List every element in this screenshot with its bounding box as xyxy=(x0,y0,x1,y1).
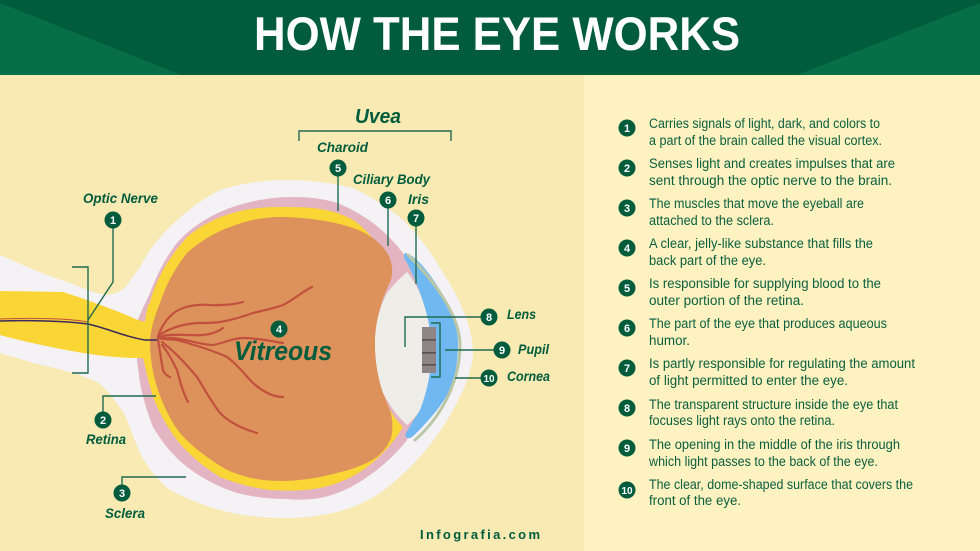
item 7: Is partly responsible for regulating the amount xyxy=(649,356,915,371)
item 1: a part of the brain called the visual cortex. xyxy=(649,133,882,148)
item 3 xyxy=(618,196,864,228)
item 10: The clear, dome-shaped surface that covers the xyxy=(649,477,913,492)
item 6: The part of the eye that produces aqueous xyxy=(649,316,887,331)
callout 1: optic nerve: Optic Nerve xyxy=(83,190,158,206)
item 3: attached to the sclera. xyxy=(649,213,774,228)
callout 3: sclera: Sclera xyxy=(105,505,145,521)
item 6: 6 xyxy=(624,323,630,335)
callout 6: ciliary body: 6 xyxy=(385,195,391,207)
callout 5: choroid: 5 xyxy=(335,163,341,175)
item 9: 9 xyxy=(624,443,630,455)
item 6: humor. xyxy=(649,333,690,348)
item 10: 10 xyxy=(621,486,633,497)
source credit: Infografia.com xyxy=(420,527,540,542)
item 1: Carries signals of light, dark, and colors to xyxy=(649,116,880,131)
callout 7: iris: 7 xyxy=(413,213,419,225)
item 4: A clear, jelly-like substance that fills the xyxy=(649,236,873,251)
callout 7: iris xyxy=(408,191,429,284)
callout 6: ciliary body: Ciliary Body xyxy=(353,171,431,187)
item 7 xyxy=(618,356,915,388)
item 3: The muscles that move the eyeball are xyxy=(649,196,864,211)
pupil xyxy=(422,327,436,373)
header banner xyxy=(0,0,980,75)
callout 7: iris: Iris xyxy=(408,191,429,207)
item 6 xyxy=(618,316,887,348)
item 9: The opening in the middle of the iris through xyxy=(649,437,900,452)
callout 2: retina: Retina xyxy=(86,431,126,447)
callout 4: vitreous: Vitreous xyxy=(234,336,332,366)
item 5 xyxy=(618,276,881,308)
callout 3: sclera: 3 xyxy=(119,488,125,500)
eye diagram xyxy=(0,180,473,518)
item 2 xyxy=(618,156,895,188)
item 5: Is responsible for supplying blood to the xyxy=(649,276,881,291)
callout 9: pupil: 9 xyxy=(499,345,505,357)
item 5: outer portion of the retina. xyxy=(649,293,804,308)
item 4: 4 xyxy=(624,243,631,255)
callout 2: retina: 2 xyxy=(100,415,106,427)
item 10: front of the eye. xyxy=(649,493,741,508)
callout 2: retina xyxy=(86,396,156,447)
aqueous chamber xyxy=(404,253,458,438)
item 8 xyxy=(618,397,898,428)
callout 1: optic nerve: 1 xyxy=(110,215,116,227)
callout 1: optic nerve xyxy=(72,190,158,373)
callout 10: cornea xyxy=(455,368,550,386)
callout 10: cornea: 10 xyxy=(483,374,495,385)
sclera xyxy=(0,180,473,518)
callout 9: pupil: Pupil xyxy=(518,341,550,357)
item 8: The transparent structure inside the eye that xyxy=(649,397,898,412)
callout 9: pupil xyxy=(431,323,550,377)
panel: diagram background xyxy=(0,75,584,551)
callout 8: lens xyxy=(405,306,536,347)
callout 6: ciliary body xyxy=(353,171,431,246)
item 2: 2 xyxy=(624,163,630,175)
callout 8: lens: 8 xyxy=(486,312,492,324)
item 7: 7 xyxy=(624,363,630,375)
callout 4: vitreous: 4 xyxy=(276,324,283,336)
callout 3: sclera xyxy=(105,477,186,521)
item 5: 5 xyxy=(624,283,630,295)
title: HOW THE EYE WORKS xyxy=(254,7,740,60)
callout: uvea bracket and label xyxy=(299,106,451,141)
callout 10: cornea: Cornea xyxy=(507,368,550,384)
item 2: sent through the optic nerve to the brain. xyxy=(649,173,892,188)
callout 5: choroid: Charoid xyxy=(317,139,368,155)
panel: descriptions background xyxy=(584,75,980,551)
item 1 xyxy=(618,116,882,148)
item 7: of light permitted to enter the eye. xyxy=(649,373,848,388)
blood vessels xyxy=(0,287,312,433)
item 4 xyxy=(618,236,873,268)
item 9: which light passes to the back of the eye. xyxy=(648,454,878,469)
choroid xyxy=(137,197,432,500)
cornea strip xyxy=(408,255,460,440)
callout 5: choroid xyxy=(317,139,368,211)
retina and optic nerve sheath xyxy=(0,207,403,491)
lens xyxy=(375,272,432,425)
description list xyxy=(618,116,915,508)
vitreous body xyxy=(150,217,392,481)
callout 4: vitreous xyxy=(234,320,332,366)
callout: uvea bracket and label: Uvea xyxy=(355,106,401,128)
item 3: 3 xyxy=(624,203,630,215)
item 9 xyxy=(618,437,900,469)
item 2: Senses light and creates impulses that are xyxy=(649,156,895,171)
item 4: back part of the eye. xyxy=(649,253,766,268)
item 8: focuses light rays onto the retina. xyxy=(649,413,835,428)
item 1: 1 xyxy=(624,123,630,135)
item 8: 8 xyxy=(624,403,630,415)
callout 8: lens: Lens xyxy=(507,306,536,322)
item 10 xyxy=(618,477,913,508)
optic nerve fibre xyxy=(0,321,158,340)
